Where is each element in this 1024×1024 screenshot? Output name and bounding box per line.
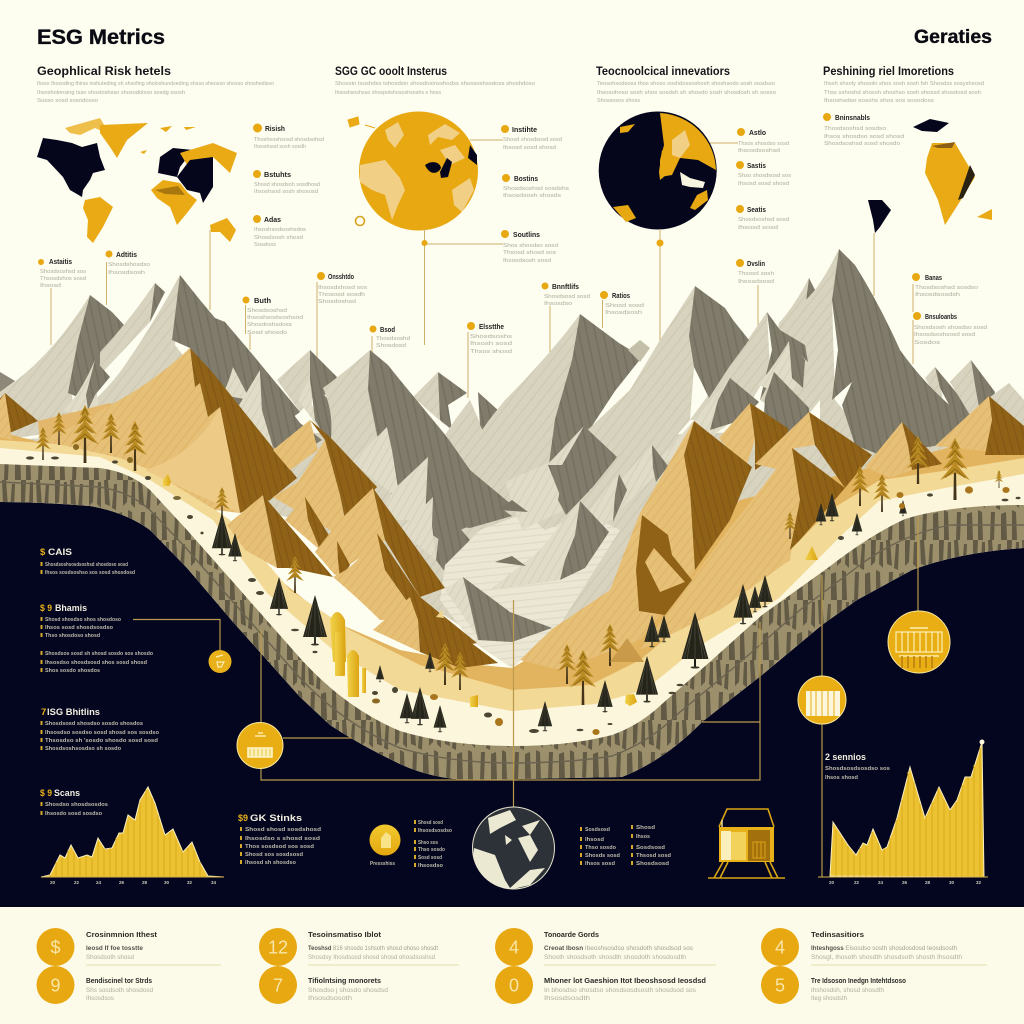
icon coin: data grid bbox=[888, 611, 950, 673]
dark text: ISG Bhitlins bbox=[40, 707, 160, 752]
list column 2: Thsosd sosd bbox=[636, 853, 671, 859]
section: technological innovations heading: Teocnoolcical innevatiors bbox=[596, 66, 730, 78]
dark text: Bhamis: Shosdsos sosd sh shosd sosdo sos shosdo bbox=[45, 651, 154, 657]
label: Adtitis: Shosdshosdso bbox=[108, 262, 150, 268]
label: Bstuhts: Bstuhts bbox=[264, 170, 291, 179]
bottom column 2: Shosdso j shosdo shosdsd bbox=[308, 988, 388, 994]
mountains: gold range right bbox=[520, 396, 1024, 670]
label: Onsshtdo: Thososd sosdh bbox=[318, 292, 365, 298]
valley river bbox=[440, 500, 620, 668]
list column 2: Shosds sosd bbox=[585, 853, 620, 859]
label: Adas: Adas bbox=[264, 215, 281, 224]
icon: mining machine bbox=[708, 809, 785, 878]
label: Instihte bbox=[501, 125, 562, 151]
label: Astaitis: Thsosdshos sosd bbox=[40, 276, 86, 282]
bottom column 3: 0 bbox=[509, 976, 519, 996]
label: Sastis bbox=[736, 161, 791, 187]
globe: bottom grey bbox=[472, 807, 554, 889]
area chart left: 32 bbox=[187, 880, 193, 885]
callout dots on lines bbox=[422, 240, 664, 246]
section: geophysical risk heading bbox=[37, 66, 274, 104]
cliff band bbox=[0, 464, 1024, 780]
bottom column 4: Ihshosdsh, shosd shosdth bbox=[811, 988, 884, 994]
label: Astlo: Astlo bbox=[749, 128, 766, 137]
dark text: CAIS: CAIS bbox=[48, 547, 72, 558]
label: Astlo: Ihsosdsoshsd bbox=[738, 148, 780, 154]
dark text: ISG Bhitlins: Thsosdso sh 'sosdo shosdo sosd sosd bbox=[45, 738, 158, 744]
dark text: Bhamis: Bhamis bbox=[55, 603, 87, 614]
label: Adas: Ihsoshsodsoshsdos bbox=[254, 227, 306, 233]
label: Bostins: Shosdsoshsd sosdshs bbox=[503, 186, 569, 192]
bottom column 1: Ihsosdsos bbox=[86, 996, 114, 1002]
section: technological innovations heading: Shossosos shoss bbox=[597, 98, 640, 104]
dark text: GK Stinks: Shosd shosd sosdshosd bbox=[245, 827, 321, 833]
list column 1: Ihsosdso bbox=[418, 863, 444, 869]
dark text: CAIS bbox=[40, 547, 135, 576]
label: Risish: Thoshsoshsosd shosdsohsd bbox=[254, 137, 324, 143]
dark text: Scans: Ihsosdo sosd sosdso bbox=[45, 811, 103, 817]
dark text: Scans bbox=[40, 788, 108, 817]
dark text: CAIS: $ bbox=[40, 547, 46, 558]
label: Buth: Shosdoshsdoss bbox=[247, 322, 292, 328]
label: Elsstthe bbox=[467, 322, 512, 355]
bottom panel bbox=[0, 907, 1024, 1024]
grey peak group centre front bbox=[445, 500, 552, 642]
dark text: GK Stinks: $9 bbox=[238, 813, 248, 824]
area chart right: 30 bbox=[949, 880, 955, 885]
label: Bninsnabls: Thosdsoshsd sosdso bbox=[824, 126, 886, 132]
bottom column 4: Tedinsasitiors bbox=[811, 932, 864, 939]
label: Buth: Sosd shosdo bbox=[247, 330, 287, 336]
bottom column 2: 7 bbox=[273, 976, 283, 996]
label: Astlo bbox=[737, 128, 789, 154]
dark text: Scans: Shosdso shosdsosdos bbox=[45, 802, 108, 808]
map right fragments bbox=[868, 119, 992, 233]
dark text: sennios: 2 sennios bbox=[825, 752, 866, 763]
bottom column 4: 5 bbox=[775, 976, 785, 996]
section: technological innovations heading: Ihsosohoso sosh shos sosdsh sh shosdo sosh shosdosh sh sosso bbox=[597, 90, 776, 96]
label: Elsstthe: Elsstthe bbox=[479, 322, 504, 331]
dark text: GK Stinks: Thos sosdsod sos sosd bbox=[245, 844, 314, 850]
bottom column 1: Shosdsoth shosd bbox=[86, 955, 134, 961]
label: Adtitis: Ihsosdsosh bbox=[108, 270, 145, 276]
bottom column 4: Iteg shosdsth bbox=[811, 996, 847, 1002]
area chart right: 32 bbox=[976, 880, 982, 885]
label: Bsod: Thosdsoshd bbox=[376, 336, 410, 342]
title: ESG Metrics bbox=[37, 26, 165, 49]
label: Seatis: Shosdsoshsd sosd bbox=[738, 217, 789, 223]
dark lower panel bbox=[0, 502, 1024, 907]
label: Bsod: Bsod bbox=[380, 325, 395, 334]
section: geophysical risk heading: Ihsosholonsing tsso shostoshsso shosodolsso sosdg ssosh bbox=[37, 90, 185, 96]
ground: sand layers bbox=[0, 425, 1024, 770]
label: Dvslin bbox=[736, 259, 774, 285]
label: Adtitis: Adtitis bbox=[116, 250, 137, 259]
label: Dvslin: Dvslin bbox=[747, 259, 765, 268]
label: Banas: Banas bbox=[925, 273, 942, 282]
label: Bnnftlifs: Ihsosdso bbox=[544, 301, 572, 307]
icon coin: gold with label: Pressshiss bbox=[370, 861, 395, 867]
connector lines on dark bbox=[133, 516, 918, 877]
bottom column 3: Creoat Ibosn Ibeoshsosdso shosdoth shosdsod sos bbox=[544, 946, 693, 952]
label: Onsshtdo: Ihsosdshosd sos bbox=[318, 285, 367, 291]
label: Elsstthe: Shosdsoshs bbox=[470, 334, 512, 340]
dark text: GK Stinks: GK Stinks bbox=[250, 813, 302, 824]
bottom column 1: Shs sosdsoth shosdosd bbox=[86, 988, 153, 994]
label: Bnsuloanbs bbox=[913, 312, 987, 346]
dark text: ISG Bhitlins: 7 bbox=[41, 707, 46, 718]
label: Soutlins: Shos shosdso sosd bbox=[503, 243, 558, 249]
label: Elsstthe: Thsos shosd bbox=[470, 349, 512, 355]
dark text: Bhamis: Ihsosdso shosdsosd shos sosd shosd bbox=[45, 660, 147, 666]
label: Bnnftlifs: Bnnftlifs bbox=[552, 282, 579, 291]
bottom column 4: Tre Idsoson Inedgn Intehtdsoso bbox=[811, 978, 906, 985]
section: geophysical risk heading: Ihsso Ihosoding thirss inshuteding sh shsofing sholoshundseding shsso sheosso shosso shoshedisso bbox=[37, 81, 274, 87]
section: technological innovations heading: Teosohsodsoss thos shoso soshdossoshosh shoshsodo sosh sosdsso bbox=[597, 81, 775, 87]
dark text: GK Stinks: Ihsosdso s shosd sosd bbox=[245, 836, 320, 842]
section: ESG heading: Shossin tsoshdss tshosdsin shosdosinsshodss shossoshssdoss shoshdoso bbox=[335, 81, 535, 87]
label: Adtitis bbox=[106, 250, 150, 276]
icon coin: small left bbox=[208, 650, 232, 673]
label: Instihte: Shosd shosdsosd sosd bbox=[503, 137, 562, 143]
label: Bostins: Ihsosdsosh shosds bbox=[503, 193, 561, 199]
label: Onsshtdo bbox=[317, 272, 367, 305]
label: Soutlins: Ihsosdsosh sosd bbox=[503, 258, 551, 264]
bottom column 1 bbox=[36, 928, 221, 1004]
area chart right: 26 bbox=[902, 880, 908, 885]
world map left bbox=[37, 118, 237, 243]
area chart right: 20 bbox=[829, 880, 835, 885]
area chart left: 30 bbox=[164, 880, 170, 885]
bottom column 2: 12 bbox=[268, 938, 288, 958]
label: Bsod bbox=[370, 325, 410, 349]
bottom column 3: Tonoarde Gords bbox=[544, 932, 599, 939]
area chart left: 26 bbox=[119, 880, 125, 885]
dark text: CAIS: Ihsos sosdsoshso sos sosd shosdosd bbox=[45, 570, 135, 576]
label: Bnsuloanbs: Ihsosdsoshsosd sosd bbox=[914, 332, 975, 338]
dark text: sennios: Ihsos shosd bbox=[825, 775, 858, 781]
bottom column 2 bbox=[259, 928, 459, 1004]
bottom column 2: Teoshsd 816 shosdo 1shsoth shosd ohoso shosdt bbox=[308, 946, 438, 952]
label: Astaitis: Shosdsoshsd sos bbox=[40, 269, 86, 275]
label: Adas bbox=[253, 215, 306, 248]
area chart left: 24 bbox=[96, 880, 102, 885]
label: Dvslin: Ihsosdsosd bbox=[738, 279, 774, 285]
dark text: Bhamis: Thso shosdoso shosd bbox=[45, 633, 100, 639]
label: Astlo: Thsos shosdso sosd bbox=[738, 141, 789, 147]
globe: ESG gold bbox=[348, 112, 478, 230]
bottom column 4: 4 bbox=[775, 938, 785, 958]
valley base bbox=[0, 430, 1024, 660]
label: Bostins bbox=[502, 174, 569, 199]
label: Bostins: Bostins bbox=[514, 174, 538, 183]
section: geophysical risk heading: Sosso sosd sosodosso bbox=[37, 98, 98, 104]
area chart right: 22 bbox=[854, 880, 860, 885]
label: Buth: Buth bbox=[254, 296, 271, 305]
bottom column 3: In bhosdso shosdso shosdsosdsosth shosdsod sos bbox=[544, 988, 696, 994]
label: Instihte: Ihsosd sosd shosd bbox=[503, 145, 556, 151]
dark text: Bhamis: Ihsos sosd shosdsosdso bbox=[45, 625, 114, 631]
label: Bninsnabls: Shosdsoshsd sosd shosdo bbox=[824, 141, 900, 147]
area chart left bbox=[41, 787, 224, 885]
bottom column 4: Shosgt, Ihosoth shosdth shosdsoth shosth Ihsosdth bbox=[811, 955, 962, 961]
label: Soutlins: Thsosd shosd sos bbox=[503, 250, 556, 256]
dark text: Bhamis bbox=[40, 603, 154, 674]
area chart left: 34 bbox=[211, 880, 217, 885]
label: Dvslin: Thsosd sosh bbox=[738, 271, 774, 277]
bottom column 1: 9 bbox=[50, 976, 61, 996]
bottom column 3: Mhoner lot Gaeshion Itot Ibeoshsosd Ieosdsd bbox=[544, 978, 706, 985]
label: Onsshtdo: Shosdoshsd bbox=[318, 299, 356, 305]
list column 2: Shosdsosd bbox=[636, 861, 669, 867]
area chart right: 28 bbox=[925, 880, 931, 885]
label: Bnsuloanbs: Bnsuloanbs bbox=[925, 312, 957, 321]
label: Bstuhts bbox=[253, 170, 320, 195]
trees: black pines bbox=[212, 493, 907, 732]
label: Banas: Thosdsoshsd sosdso bbox=[915, 285, 978, 291]
bottom column 3: Shosth shosdsoth shosdth shosdoth shosdosdth bbox=[544, 955, 686, 961]
dark text: GK Stinks bbox=[238, 813, 321, 866]
bottom column 4 bbox=[761, 928, 987, 1004]
dark text: Bhamis: $ 9 bbox=[40, 603, 52, 614]
area chart right: 24 bbox=[878, 880, 884, 885]
label: Banas bbox=[912, 273, 978, 298]
label: Bnsuloanbs: Shosdsosh shosdso sosd bbox=[914, 325, 987, 331]
section: remaining innovations heading: Ihsoshsdso sosshs shos sos sosodoss bbox=[824, 98, 934, 104]
list column 2: Shosd bbox=[636, 825, 655, 831]
label: Adas: Shosdsosh shosd bbox=[254, 235, 303, 241]
label: Ratios: Shosd sosd bbox=[605, 303, 644, 309]
trees: gold pines bbox=[35, 405, 1003, 705]
mountains: gold range left bbox=[0, 348, 498, 668]
dark text: ISG Bhitlins: Ihsosdso sosdso sosd shosd sos sosdso bbox=[45, 730, 160, 736]
label: Bstuhts: Shosd shosdsoh sosdhosd bbox=[254, 182, 320, 188]
grey peak group back left bbox=[0, 275, 337, 460]
dark text: Bhamis: Shosd shosdso shos shosdoso bbox=[45, 617, 122, 623]
bottom column 1: $ bbox=[50, 938, 61, 958]
dark text: Scans: Scans bbox=[54, 788, 80, 799]
list column 1 bbox=[414, 820, 453, 869]
label: Sastis: Shso shosdsosd sos bbox=[738, 173, 791, 179]
section: remaining innovations heading bbox=[823, 66, 984, 104]
label: Bnsuloanbs: Sosdos bbox=[914, 340, 940, 346]
dark text: ISG Bhitlins: ISG Bhitlins bbox=[47, 707, 100, 718]
list column 1: Ihsosdsosdso bbox=[418, 828, 453, 834]
list column 2: Sosdsosd bbox=[585, 827, 610, 833]
list column 1: Thso sosdo bbox=[418, 847, 446, 853]
dark text: Bhamis: Shos sosdo shosdos bbox=[45, 668, 100, 674]
bottom column 1: Ieosd If foe tosstte bbox=[86, 946, 144, 952]
bottom column 4: Ihteshgoss Elsosdso sosth shosdosdosd Ieosdsosth bbox=[811, 946, 957, 952]
area chart left: 20 bbox=[50, 880, 56, 885]
grey peak group centre left bbox=[323, 350, 512, 572]
list column 2 bbox=[580, 825, 671, 867]
label: Bnnftlifs bbox=[542, 282, 590, 307]
list column 2: Thso sosdo bbox=[585, 845, 617, 851]
list column 1: Shosd sosd bbox=[418, 820, 443, 826]
icon coin: building bbox=[237, 722, 283, 768]
dark text: CAIS: Shosdsoshsosdsoshsd shosdoso sosd bbox=[45, 562, 128, 568]
bottom column 1: Bendiscinel tor Strds bbox=[86, 978, 152, 985]
section: technological innovations heading bbox=[596, 66, 776, 104]
label: Onsshtdo: Onsshtdo bbox=[328, 272, 354, 281]
bottom column 2: Ihsosdsosoth bbox=[308, 996, 352, 1002]
label: Elsstthe: Ihsosh sosd bbox=[470, 341, 512, 347]
label: Astaitis: Ihsosd bbox=[40, 283, 61, 289]
bottom column 3 bbox=[495, 928, 716, 1004]
label: Ratios: Ratios bbox=[612, 291, 630, 300]
label: Seatis: Ihsosd sosd bbox=[738, 225, 778, 231]
label: Banas: Ihsosdsosdsh bbox=[915, 292, 960, 298]
bottom column 3: 4 bbox=[509, 938, 519, 958]
dark text: GK Stinks: Ihsosd sh shosdso bbox=[245, 860, 297, 866]
section: ESG heading: SGG GC ooolt Insterus bbox=[335, 66, 447, 78]
label: Astaitis: Astaitis bbox=[49, 257, 72, 266]
area chart left: 22 bbox=[74, 880, 80, 885]
grey peak group right back bbox=[690, 249, 1024, 465]
label: Astaitis bbox=[38, 257, 86, 289]
area chart left: 28 bbox=[142, 880, 148, 885]
label: Ratios bbox=[600, 291, 644, 316]
bottom column 1: Crosinmnion Ithest bbox=[86, 932, 158, 939]
label: Seatis: Seatis bbox=[747, 205, 766, 214]
label: Sastis: Sastis bbox=[747, 161, 766, 170]
small tent bbox=[610, 638, 644, 662]
dark text: ISG Bhitlins: Shosdsosd shosdso sosdo shosdos bbox=[45, 721, 143, 727]
section: remaining innovations heading: Ihssh shsoly shosoln shos sosh sosh fsh Shosdss sosyshsosd bbox=[824, 81, 984, 87]
callout lines behind the mountains bbox=[51, 140, 913, 398]
bottom column 2: Tesoinsmatiso Iblot bbox=[308, 932, 382, 939]
label: Adas: Sosdoss bbox=[254, 242, 276, 248]
globe: technological black bbox=[599, 112, 717, 230]
mountains: grey range bbox=[0, 249, 1024, 668]
list column 2: Ihsos bbox=[636, 834, 650, 840]
list column 1: Sosd sosd bbox=[418, 855, 442, 861]
label: Bstuhts: Ihsoshsod sosh shososd bbox=[254, 189, 318, 195]
list column 2: Ihsosd bbox=[585, 837, 604, 843]
label: Soutlins: Soutlins bbox=[513, 230, 540, 239]
section: remaining innovations heading: Peshining riel Imoretions bbox=[823, 66, 954, 78]
area chart right bbox=[818, 740, 988, 885]
icon coin: white pillars bbox=[798, 676, 846, 724]
grey peak group right front bbox=[470, 286, 810, 590]
title right: Geraties bbox=[914, 27, 992, 48]
list column 2: Sosdsosd bbox=[636, 845, 665, 851]
dark text: Scans: $ 9 bbox=[40, 788, 52, 799]
dark text: GK Stinks: Shosd sos sosdsosd bbox=[245, 852, 303, 858]
label: Sastis: Ihsosd sosd shosd bbox=[738, 181, 789, 187]
label: Soutlins bbox=[501, 230, 558, 264]
label: Seatis bbox=[736, 205, 789, 231]
label: Buth: Ihsoshsodsoshsod bbox=[247, 315, 303, 321]
rocks bbox=[26, 444, 1020, 735]
label: Risish bbox=[253, 124, 324, 150]
label: Bnnftlifs: Shosdsosd sosd bbox=[544, 294, 590, 300]
bottom column 2: Tifiolntsing monorets bbox=[308, 978, 381, 985]
bottom column 3: Ihsosdsosdth bbox=[544, 996, 590, 1002]
section: ESG heading: Ihsoshsoshsso shospolshososhsoshs s hoss bbox=[335, 90, 441, 96]
label: Risish: Ihsoshsod sosh sosdh bbox=[254, 144, 306, 150]
section: ESG heading bbox=[335, 66, 535, 96]
section: remaining innovations heading: Thss sshoshd shossh shoshso sosh shossd shosdosd sosh bbox=[824, 90, 981, 96]
label: Bninsnabls bbox=[823, 113, 904, 147]
label: Risish: Risish bbox=[265, 124, 285, 133]
label: Buth: Shosdsoshsd bbox=[247, 308, 287, 314]
dark text: ISG Bhitlins: Shosdsoshsosdso sh sosdo bbox=[45, 746, 122, 752]
bottom column 2: Shosdsy Ihosdsosd shosd shosd ohosdsoshsd bbox=[308, 955, 435, 961]
gold ore towers bbox=[163, 474, 818, 707]
label: Instihte: Instihte bbox=[512, 125, 537, 134]
section: geophysical risk heading: Geophlical Risk hetels bbox=[37, 66, 171, 78]
list column 1: Shso sos bbox=[418, 840, 438, 846]
icon coin: gold with label bbox=[370, 824, 400, 867]
dark text: sennios bbox=[825, 752, 890, 781]
label: Ratios: Ihsosdsosh bbox=[605, 310, 642, 316]
label: Bninsnabls: Bninsnabls bbox=[835, 113, 870, 122]
list column 2: Ihsos sosd bbox=[585, 861, 615, 867]
dark text: sennios: Shosdsosdsosdso sos bbox=[825, 766, 890, 772]
label: Buth bbox=[242, 296, 303, 336]
label: Bninsnabls: Ihsos shosdso sosd shosd bbox=[824, 134, 904, 140]
label: Bsod: Shosdosd bbox=[376, 343, 406, 349]
